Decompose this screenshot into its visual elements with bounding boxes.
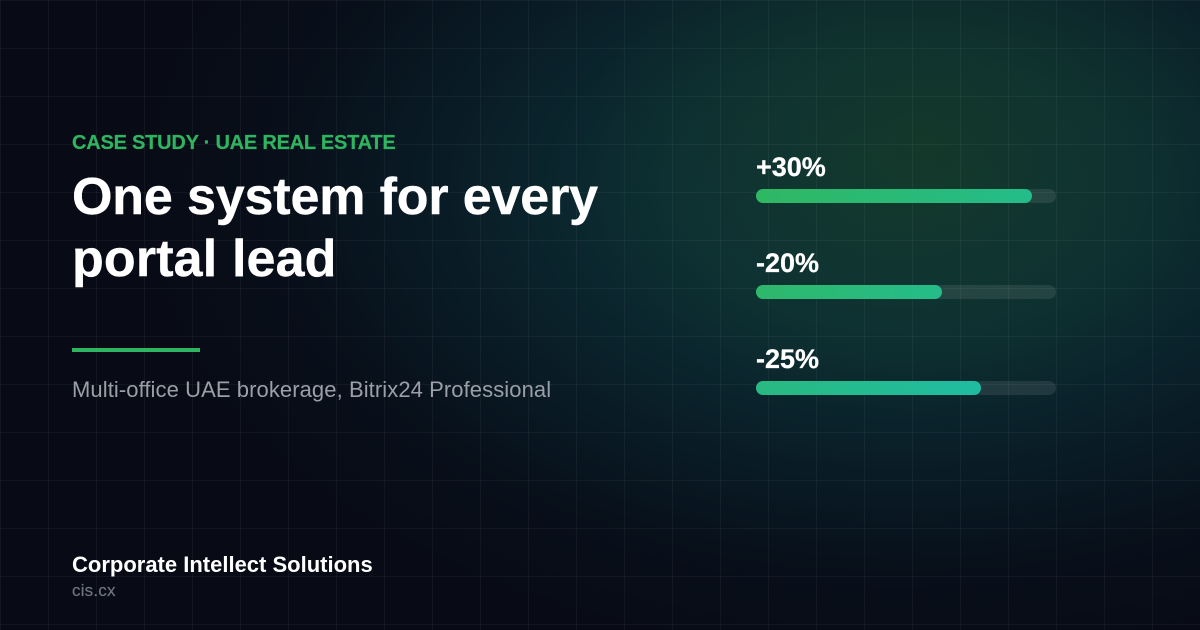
- title: One system for every: [72, 168, 598, 226]
- value: -20%: -20%: [756, 248, 819, 278]
- subtitle: Multi-office UAE brokerage, Bitrix24 Professional: [72, 377, 551, 402]
- metric: +30%: [756, 152, 1056, 203]
- website: cis.cx: [72, 581, 116, 600]
- metric: -25%: [756, 344, 1056, 395]
- value: +30%: +30%: [756, 152, 826, 182]
- title: portal lead: [72, 230, 337, 288]
- bar: +30%: [756, 189, 1056, 203]
- metric: -20%: [756, 248, 1056, 299]
- accent rule: [72, 348, 200, 352]
- bar: -25%: [756, 381, 1056, 395]
- bar: -20%: [756, 285, 1056, 299]
- company name: Corporate Intellect Solutions: [72, 552, 373, 577]
- title: [72, 168, 598, 288]
- eyebrow label: CASE STUDY · UAE REAL ESTATE: [72, 132, 396, 154]
- value: -25%: -25%: [756, 344, 819, 374]
